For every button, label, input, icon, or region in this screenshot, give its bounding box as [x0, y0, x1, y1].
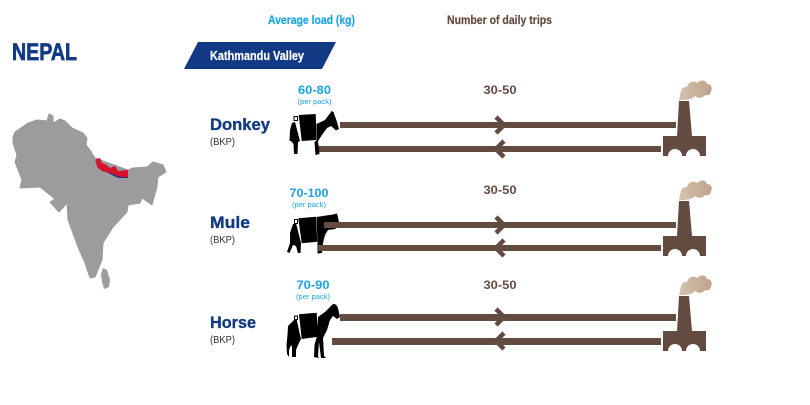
donkey load [298, 83, 332, 106]
mule label: (BKP) [210, 234, 235, 246]
donkey label [210, 115, 271, 148]
row: donkey [210, 80, 712, 157]
horse chevrons [496, 309, 504, 349]
horse load: 70-90 [296, 278, 330, 292]
factory [663, 180, 712, 256]
icon: horse with pack [286, 304, 340, 358]
mule trips: 30-50 [484, 183, 517, 197]
horse trips: 30-50 [484, 278, 517, 292]
row: mule [210, 180, 712, 256]
column heading: number of daily trips: Number of daily trips [447, 13, 552, 27]
factory [663, 80, 712, 156]
donkey label: Donkey [210, 115, 271, 134]
mule label: Mule [210, 213, 250, 232]
donkey arrows [316, 122, 676, 152]
banner: Kathmandu Valley: Kathmandu Valley [210, 48, 305, 63]
mule chevrons [496, 217, 504, 256]
icon: donkey with pack [290, 111, 339, 155]
map: South Asia with Nepal highlighted [13, 114, 166, 289]
title: Nepal: NEPAL [12, 39, 77, 66]
icon: mule with pack [287, 214, 340, 254]
donkey load: 60-80 [298, 83, 331, 97]
horse load [296, 278, 330, 301]
mule load: 70-100 [290, 186, 329, 200]
banner: Kathmandu Valley [184, 42, 336, 69]
mule label [210, 213, 250, 246]
mule load [290, 186, 329, 209]
factory [663, 275, 712, 351]
row: horse [210, 275, 712, 358]
horse label [210, 313, 256, 346]
horse label: Horse [210, 313, 256, 332]
donkey chevrons [496, 117, 504, 157]
donkey trips: 30-50 [484, 83, 517, 97]
mule load: (per pack) [292, 202, 326, 209]
column heading: average load: Average load (kg) [268, 13, 355, 27]
donkey load: (per pack) [298, 99, 332, 106]
horse load: (per pack) [296, 294, 330, 301]
mule arrows [318, 222, 676, 251]
horse arrows [332, 314, 676, 345]
horse label: (BKP) [210, 334, 235, 346]
donkey label: (BKP) [210, 136, 235, 148]
